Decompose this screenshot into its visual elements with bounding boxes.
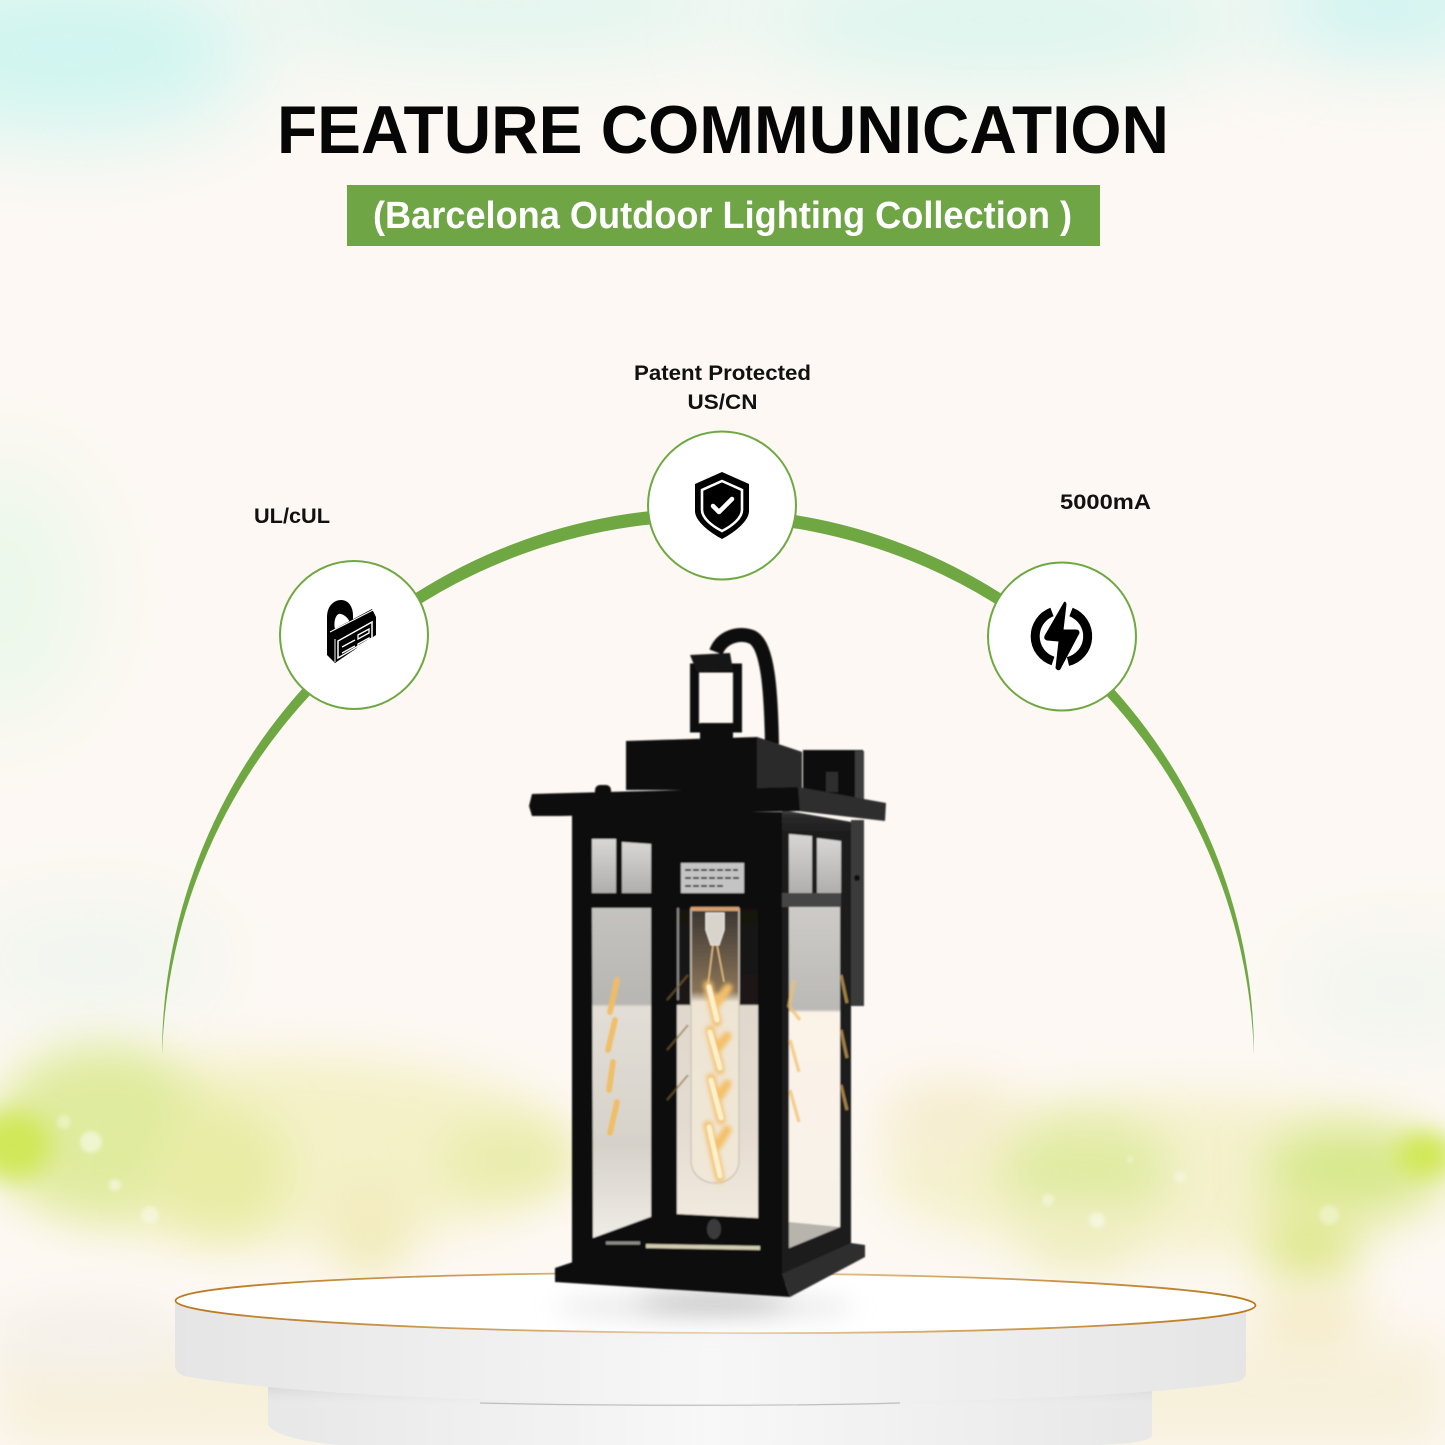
feature label: patent protected: US/CN [688, 391, 758, 414]
icon: lightning bolt in broken ring [1035, 602, 1088, 670]
roof overhang [529, 787, 886, 821]
podium top surface with gold rim [175, 1271, 1256, 1335]
lantern contact shadow [555, 1293, 855, 1321]
title: FEATURE COMMUNICATION [277, 92, 1169, 168]
side upper window panes [789, 834, 841, 893]
podium: stacked white platform [175, 1271, 1256, 1445]
badge: UL certificate icon [280, 561, 428, 709]
feature label: UL/cUL: UL/cUL [254, 505, 330, 528]
lantern hanging ring [690, 653, 738, 739]
front upper window panes [592, 839, 651, 893]
feature label: patent protected: Patent Protected [634, 362, 811, 385]
upper podium tier [175, 1303, 1246, 1403]
lantern base [555, 1243, 865, 1297]
feature label: patent protected [634, 362, 811, 414]
filament glow [708, 985, 728, 1178]
lantern cap [595, 737, 802, 797]
back mounting plate [803, 750, 864, 1006]
lantern hook arm [716, 635, 772, 744]
glass tube bulb with glowing filament [691, 907, 739, 1183]
lower podium tier [268, 1385, 1152, 1445]
mullion reflections [667, 975, 688, 1100]
feature label: 5000mA: 5000mA [1060, 491, 1151, 514]
lantern side body [782, 810, 851, 1285]
product photo: black outdoor wall lantern [529, 635, 886, 1297]
badge: patent shield icon [648, 432, 796, 580]
lantern front body [572, 812, 782, 1274]
center glass pane [677, 908, 758, 1218]
icon: shield with check mark [695, 472, 749, 539]
icon: certificate card with seal [327, 600, 376, 663]
subtitle banner: (Barcelona Outdoor Lighting Collection ) [373, 195, 1072, 237]
subtitle banner [347, 185, 1100, 246]
bokeh dots [57, 1115, 1339, 1228]
front left glass pane [592, 908, 651, 1238]
badge: 5000mA lightning icon [988, 562, 1136, 710]
lamp socket and silver label [681, 836, 744, 893]
side glass pane [789, 907, 847, 1248]
lantern floor inside [593, 1216, 760, 1250]
green arc connecting the feature badges [162, 508, 1254, 1055]
